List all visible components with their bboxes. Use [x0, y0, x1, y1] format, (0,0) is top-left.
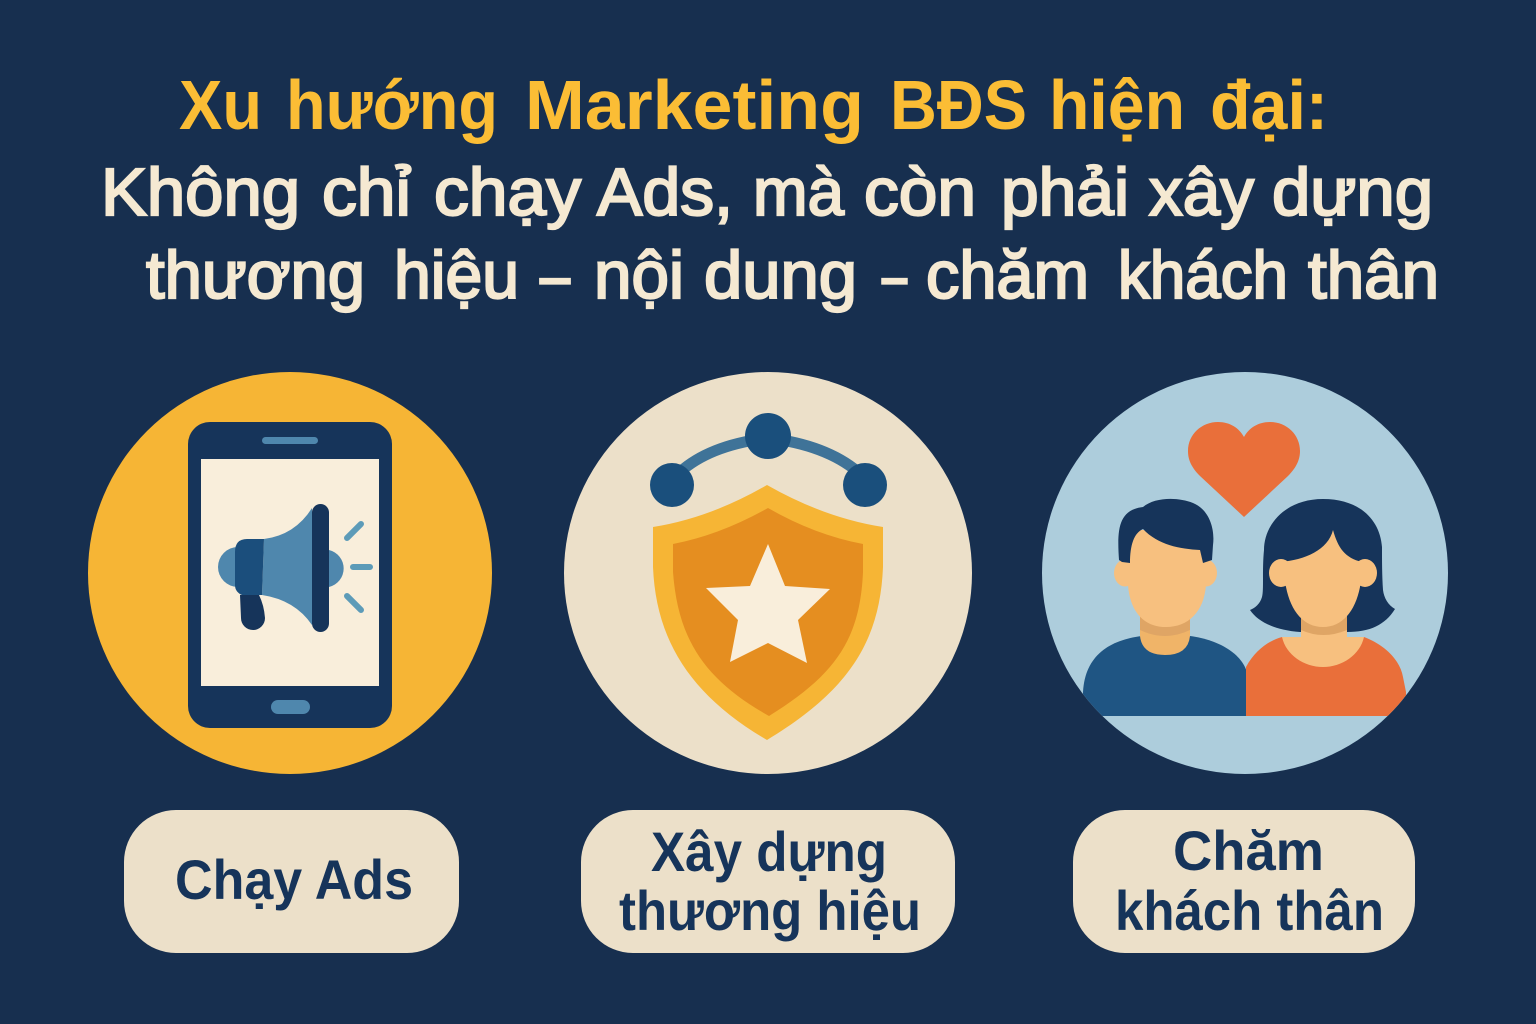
label: Chạy Ads: Chạy Ads [175, 848, 413, 911]
title line 3: nội [594, 238, 684, 313]
panel: customer care icon [1042, 372, 1448, 774]
icon: network arc [650, 413, 887, 507]
circle background light blue [1042, 372, 1448, 774]
title line 3 [146, 238, 1439, 313]
icon: smartphone [188, 422, 392, 728]
title line 1 [179, 66, 1328, 144]
title line 2: dựng [1272, 155, 1433, 230]
title line 3: dung [704, 238, 857, 313]
title line 2: chạy [434, 155, 582, 230]
label: Chăm khách thân: Chăm [1173, 819, 1324, 882]
title line 1: hiện [1049, 66, 1185, 144]
label: Chăm khách thân [1073, 810, 1415, 953]
title line 2: xây [1149, 155, 1255, 230]
icon: heart [1188, 422, 1300, 517]
icon: shield with star [653, 485, 883, 740]
title line 3: khách [1118, 238, 1288, 313]
title line 2: phải [1001, 155, 1129, 230]
panel: ads icon [88, 372, 492, 774]
title line 3: – [540, 238, 571, 313]
title line 1: hướng [286, 66, 498, 144]
panel: brand icon [564, 372, 972, 774]
label: Chạy Ads [124, 810, 459, 953]
title line 2: chỉ [322, 155, 411, 230]
title line 3: thương [146, 238, 365, 313]
title line 1: đại: [1210, 66, 1328, 144]
icon: megaphone [218, 504, 370, 632]
title line 2: mà [753, 155, 845, 230]
title line 3: – [882, 238, 907, 313]
label: Chăm khách thân: khách thân [1115, 879, 1384, 942]
infographic canvas [88, 77, 1448, 953]
label: Xây dựng thương hiệu: thương hiệu [619, 879, 921, 942]
circle background cream [564, 372, 972, 774]
icon: woman [1246, 499, 1406, 716]
title line 1: BĐS [890, 66, 1027, 144]
title line 2: còn [864, 155, 976, 230]
title line 1: Xu [179, 66, 262, 144]
title [101, 66, 1439, 313]
label: Xây dựng thương hiệu [581, 810, 955, 953]
icon: man [1083, 499, 1248, 716]
title line 2 [101, 155, 1433, 230]
title line 3: hiệu [394, 238, 519, 313]
title line 1: Marketing [525, 66, 864, 144]
title line 2: Không [101, 155, 300, 230]
title line 2: Ads, [597, 155, 733, 230]
title line 3: thân [1308, 238, 1439, 313]
title line 3: chăm [926, 238, 1089, 313]
label: Xây dựng thương hiệu: Xây dựng [651, 820, 887, 883]
circle background yellow [88, 372, 492, 774]
